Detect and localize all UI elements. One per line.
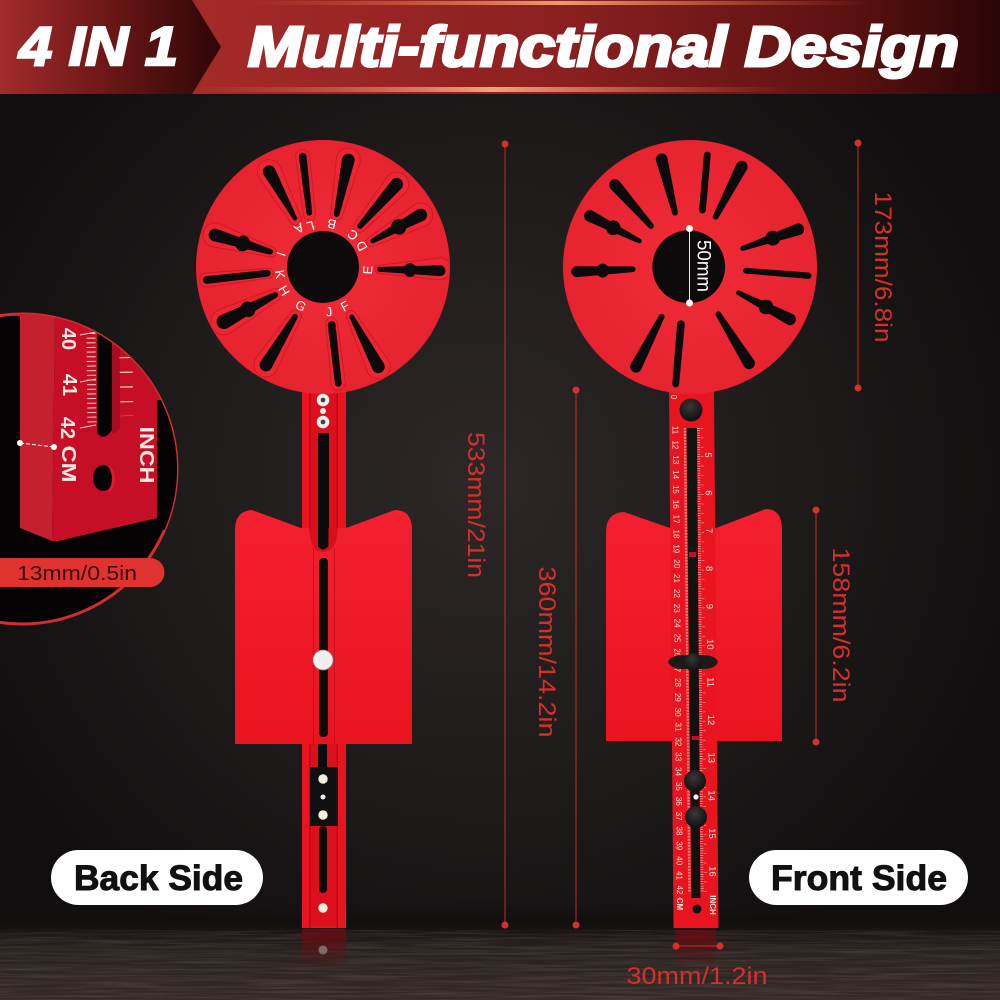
bottom glow streak [192, 87, 792, 92]
inch scale: 13 [705, 753, 716, 763]
disc letters: D [353, 238, 371, 254]
cm scale: 26 [673, 648, 682, 658]
ruler end close-up: INCH [135, 426, 157, 484]
13mm label: 13mm/0.5in [17, 563, 137, 585]
back arm [302, 390, 346, 928]
dimension 173mm [854, 140, 896, 392]
front side label: Front Side [771, 859, 947, 898]
dimension 360mm [533, 386, 580, 928]
bottom hole [692, 904, 702, 914]
disc letters: K [272, 269, 288, 280]
dimension 30mm: 30mm/1.2in [626, 963, 768, 990]
header right block [192, 0, 1000, 94]
cm scale: 15 [671, 485, 680, 494]
ruler end close-up: 41 [58, 374, 80, 396]
ruler ticks [685, 428, 706, 892]
cm scale: 21 [672, 574, 681, 583]
dimension 360mm: 360mm/14.2in [533, 566, 560, 738]
disc letters: H [275, 283, 293, 299]
disc letters: G [293, 297, 309, 315]
back side label: Back Side [74, 859, 243, 898]
T knob [668, 653, 718, 671]
ruler end close-up: 42 [56, 417, 78, 439]
dimension 533mm: 533mm/21in [462, 432, 489, 578]
inch scale: INCH [708, 895, 717, 915]
cm scale: 31 [673, 723, 682, 732]
front disc slots [571, 152, 811, 387]
cm scale: 12 [671, 440, 680, 450]
back disc slots [203, 153, 445, 387]
cm scale: 42 [675, 886, 684, 895]
cm scale: 11 [670, 426, 680, 435]
close-up ticks [80, 332, 127, 428]
back fin plate [235, 510, 412, 744]
back disc [196, 140, 451, 394]
cm scale: 37 [674, 812, 683, 821]
front disc center hole [652, 230, 725, 303]
cm scale: 22 [672, 589, 681, 598]
inch scale: 12 [705, 715, 716, 725]
cm scale: 34 [674, 767, 683, 777]
cm scale: 0 [669, 395, 678, 400]
cm scale: 30 [673, 708, 682, 717]
inch scale: 11 [704, 677, 716, 687]
top glow streak [250, 1, 870, 5]
disc letters: I [273, 250, 289, 258]
header banner [0, 0, 1000, 94]
cm scale: 17 [671, 515, 680, 524]
inch scale: 6 [702, 490, 713, 496]
detail lens [0, 310, 187, 624]
cm scale: 40 [675, 856, 684, 866]
back disc center hole [287, 231, 359, 303]
inch scale: 16 [706, 866, 718, 877]
disc letters: B [326, 216, 337, 232]
cm scale: 29 [673, 693, 682, 702]
cm scale: 27 [673, 663, 682, 673]
lower slot and plate [310, 744, 338, 954]
cm scale: 20 [672, 559, 681, 569]
cm scale: 16 [671, 500, 680, 509]
fin screw [313, 650, 333, 670]
disc letters: E [360, 265, 376, 275]
inch scale [702, 452, 718, 915]
inch scale: 10 [704, 639, 715, 650]
front disc [563, 140, 817, 394]
cm scale: 28 [673, 678, 682, 687]
inch scale: 5 [702, 452, 713, 458]
cm scale: 39 [674, 841, 683, 851]
back side tool [196, 140, 451, 971]
disc letters: A [291, 220, 307, 237]
disc letters: C [344, 226, 361, 244]
dimension 158mm [812, 506, 854, 746]
cm scale: 14 [671, 470, 680, 480]
dimension 30mm [626, 942, 768, 990]
inch scale: 15 [706, 828, 717, 839]
inch scale: 7 [703, 528, 714, 533]
inch scale: 9 [704, 604, 715, 609]
cm scale: 38 [674, 827, 683, 836]
cm scale: 36 [674, 797, 683, 806]
disc letters [272, 216, 376, 320]
dimension 173mm: 173mm/6.8in [869, 192, 896, 342]
title: Multi-functional Design [248, 15, 959, 79]
front ruler arm [669, 390, 718, 928]
front fin plate [606, 509, 782, 741]
disc letters: J [325, 304, 333, 320]
cm scale: 19 [672, 544, 681, 554]
close-up width marker [17, 440, 57, 450]
cm scale: CM [675, 898, 684, 911]
center white dot [693, 794, 699, 800]
front side tool [563, 140, 817, 968]
ruler end close-up: CM [57, 446, 79, 482]
cm scale: 24 [672, 619, 681, 628]
back side label [51, 850, 263, 905]
cm scale: 18 [672, 530, 680, 539]
inch scale: 8 [703, 566, 714, 571]
cm scale: 41 [675, 871, 684, 880]
cm scale: 32 [673, 737, 682, 747]
reflection of back arm [302, 929, 346, 971]
front side label [749, 850, 968, 905]
13mm label [0, 558, 164, 587]
wooden floor [0, 900, 1000, 1000]
top knob [680, 398, 702, 422]
lower knob two [685, 806, 707, 828]
disc letters: F [338, 297, 352, 314]
embossed slot recesses [199, 146, 451, 391]
lower knob one [684, 770, 706, 792]
cm scale: 13 [671, 455, 680, 465]
cm scale: 23 [672, 604, 681, 613]
header left block [0, 0, 221, 94]
50mm measure: 50mm [692, 240, 714, 292]
badge text: 4 IN 1 [18, 15, 178, 77]
close-up labels: 40 [57, 328, 79, 350]
disc letters: L [305, 218, 316, 234]
cm scale [669, 395, 684, 911]
top arm screws [317, 394, 329, 428]
dimension 158mm: 158mm/6.2in [827, 548, 854, 702]
50mm measure [686, 225, 714, 306]
reflection of front arm [675, 930, 716, 968]
ruler end close-up [17, 310, 187, 541]
inch scale: 14 [706, 790, 717, 801]
cm scale: 35 [674, 782, 683, 791]
dimension 533mm [462, 140, 508, 928]
cm scale: 33 [674, 752, 683, 762]
cm scale: 25 [672, 633, 682, 643]
